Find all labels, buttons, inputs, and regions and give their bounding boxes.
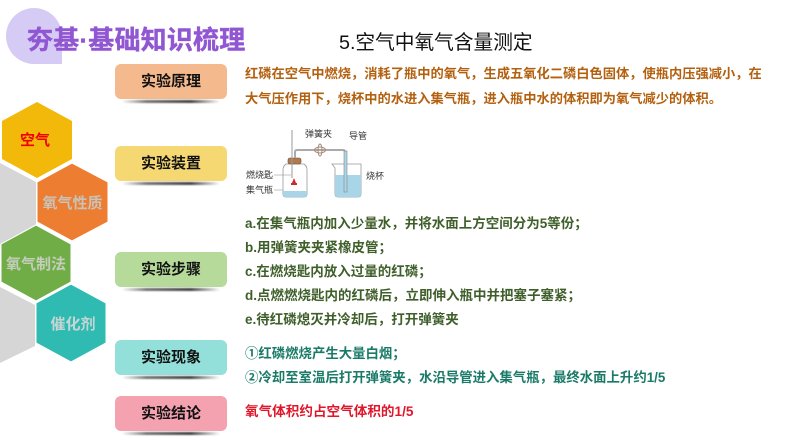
- hexagon: 催化剂: 催化剂: [50, 315, 96, 333]
- hexagon: 氧气制法: [1, 225, 71, 301]
- hexagon: 催化剂: [36, 284, 106, 362]
- button: 实验步骤: 实验步骤: [141, 261, 201, 278]
- labels: 集气瓶: [246, 184, 273, 195]
- principle text: [245, 66, 762, 106]
- beaker: [332, 151, 361, 197]
- button: 实验原理: 实验原理: [141, 73, 201, 90]
- observation text: ②冷却至室温后打开弹簧夹，水沿导管进入集气瓶，最终水面上升约1/5: [245, 370, 665, 384]
- hexagon navigation: [0, 102, 108, 363]
- button: 实验结论: [115, 396, 227, 431]
- hexagon: 氧气性质: [37, 163, 108, 241]
- labels: 弹簧夹: [305, 128, 332, 139]
- labels: [246, 128, 384, 195]
- principle text: 红磷在空气中燃烧，消耗了瓶中的氧气，生成五氧化二磷白色固体，使瓶内压强减小，在: [245, 66, 762, 81]
- hexagon: 空气: 空气: [20, 131, 50, 149]
- observation text: ①红磷燃烧产生大量白烟；: [245, 346, 406, 361]
- observation text: [245, 346, 665, 384]
- section heading: 5.空气中氧气含量测定: [339, 32, 533, 54]
- button: 实验装置: 实验装置: [141, 155, 201, 172]
- title decoration circle: [6, 8, 62, 64]
- gray decorative hexagons: [0, 163, 36, 363]
- spoon and flame: [291, 130, 297, 185]
- hexagon: 氧气性质: 氧气性质: [42, 194, 103, 212]
- labels: 烧杯: [366, 170, 384, 181]
- glass tube and clamp: [295, 144, 345, 192]
- title: 夯基·基础知识梳理: [27, 25, 245, 55]
- steps text: b.用弹簧夹夹紧橡皮管；: [245, 240, 392, 255]
- principle text: 大气压作用下，烧杯中的水进入集气瓶，进入瓶中水的体积即为氧气减少的体积。: [245, 91, 722, 106]
- steps text: a.在集气瓶内加入少量水，并将水面上方空间分为5等份；: [245, 216, 588, 231]
- collecting bottle: [283, 158, 307, 197]
- button: 实验装置: [115, 146, 227, 181]
- conclusion text: 氧气体积约占空气体积的1/5: [245, 404, 413, 419]
- steps text: c.在燃烧匙内放入过量的红磷；: [245, 264, 432, 279]
- steps text: d.点燃燃烧匙内的红磷后，立即伸入瓶中并把塞子塞紧；: [245, 288, 581, 303]
- labels: 燃烧匙: [246, 169, 273, 180]
- steps text: [245, 216, 588, 327]
- labels: 导管: [349, 130, 367, 141]
- steps text: e.待红磷熄灭并冷却后，打开弹簧夹: [245, 312, 459, 327]
- apparatus diagram: [246, 128, 384, 198]
- hexagon: 空气: [2, 102, 72, 178]
- button: 实验原理: [115, 64, 227, 99]
- button: 实验结论: 实验结论: [141, 405, 201, 422]
- button: 实验步骤: [115, 252, 227, 287]
- button: 实验现象: 实验现象: [141, 349, 201, 366]
- button: 实验现象: [115, 340, 227, 375]
- hexagon: 氧气制法: 氧气制法: [6, 255, 66, 273]
